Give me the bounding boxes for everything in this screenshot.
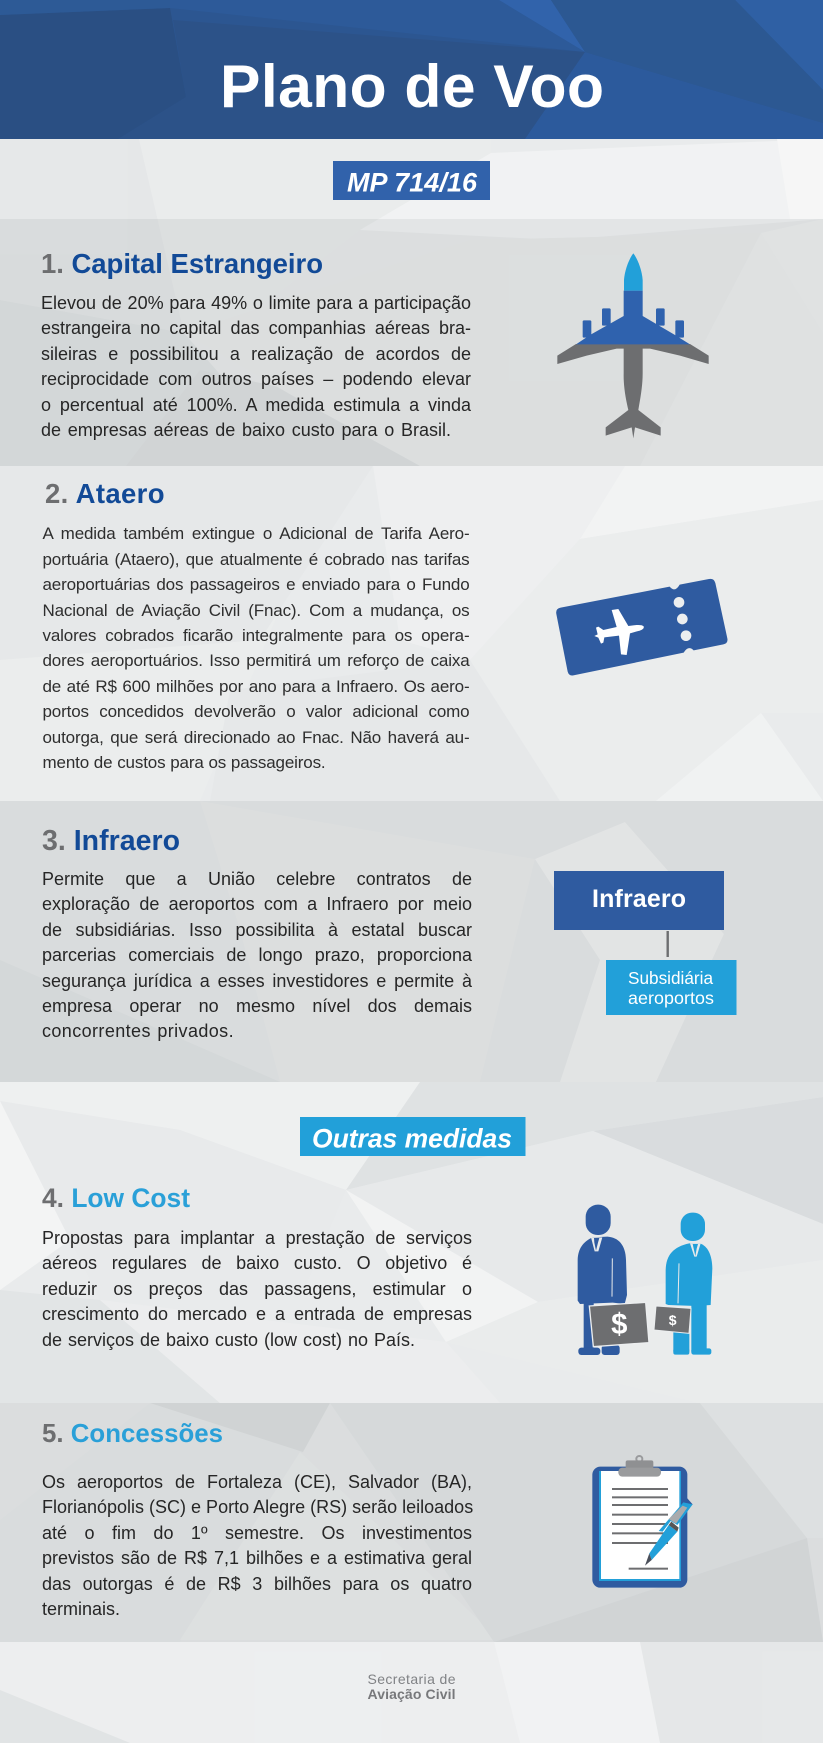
man left [578,1205,627,1355]
text block 5: das outorgas é de R$ 3 bilhões para os quatro [42,1574,472,1594]
text block 3: de subsidiárias. Isso possibilita à estatal buscar [42,920,472,940]
logo text: Secretaria de Aviação Civil [368,1671,456,1702]
box: subsidiary: aeroportos [628,988,714,1008]
heading 5: 5. Concessões [42,1420,223,1448]
icon: ticket [556,578,728,676]
heading 2: 2. Ataero [45,478,164,509]
briefcase small [654,1306,691,1333]
text block 2: mento de custos para os passageiros. [42,753,326,772]
text block 3 [42,869,472,1041]
text block 2: A medida também extingue o Adicional de Tarifa Aero- [42,524,470,543]
text block 3: segurança jurídica a esses investidores e permite à [42,971,472,991]
text block 3: exploração de aeroportos com a Infraero por meio [42,894,472,914]
text block 5: terminais. [42,1599,120,1619]
text block 4: de serviços de baixo custo (low cost) no País. [42,1330,415,1350]
panel: 4 Low Cost [42,1117,712,1355]
text block 1: de empresas aéreas de baixo custo para o Brasil. [41,420,451,440]
text block 2: portuária (Ataero), que atualmente é cobrado nas tarifas [42,550,470,569]
icon: businessmen with briefcases [578,1204,712,1355]
text block 4: reduzir os preços das passagens, estimular o [42,1279,472,1299]
text block 2: outorga, que será direcionado ao Fnac. Não haverá au- [42,728,470,747]
text block 1: Elevou de 20% para 49% o limite para a participação [41,293,471,313]
connector [666,931,669,957]
man right [666,1213,712,1355]
text block 3: empresa operar no mesmo nível dos demais [42,996,472,1016]
panel: 1 Capital Estrangeiro [0,219,823,466]
briefcase large: $ [611,1308,627,1341]
text block 1: estrangeira no capital das companhias aéreas bra- [41,318,471,338]
text block 5 [42,1472,473,1619]
text block 3: concorrentes privados. [42,1021,234,1041]
text block 2: de até R$ 600 milhões por ano para a Infraero. Os aero- [42,677,470,696]
text block 5: Os aeroportos de Fortaleza (CE), Salvador (BA), [42,1472,472,1492]
text block 1: sileiras e possibilitou a realização de acordos de [41,344,471,364]
text block 5: previstos são de R$ 7,1 bilhões e a estimativa geral [42,1548,472,1568]
text block 2: portos concedidos devolverão o valor adicional como [42,702,470,721]
badge: Outras medidas [300,1117,526,1156]
text block 2: dores aeroportuários. Isso permitirá um reforço de caixa [42,651,470,670]
briefcase small: $ [669,1312,677,1328]
text block 2: aeroportuárias dos passageiros e enviado para o Fundo [42,575,470,594]
panel: 5 Concessões [0,1403,823,1642]
panel: MP badge area [333,161,490,200]
header polygons [0,0,823,139]
text block 4 [42,1228,472,1350]
box: Infraero [554,871,724,930]
text block 3: Permite que a União celebre contratos de [42,869,472,889]
text block 4: crescimento do mercado e a entrada de empresas [42,1304,472,1324]
box: subsidiary [606,960,736,1015]
panel: 3 Infraero [0,801,823,1082]
heading 3: 3. Infraero [42,824,180,856]
logo text: Secretaria de Aviação Civil: Aviação Civil [368,1686,456,1702]
diagram: Infraero and subsidiary [554,871,736,1015]
icon: clipboard and pen [592,1455,693,1588]
text block 5: Florianópolis (SC) e Porto Alegre (RS) serão leiloados [42,1497,473,1517]
text block 2 [42,524,470,772]
heading 4: 4. Low Cost [42,1183,190,1213]
badge: MP 714/16 [333,161,490,200]
briefcase large [589,1302,649,1347]
box: Infraero: Infraero [592,885,686,913]
box: subsidiary: Subsidiária [628,968,713,988]
text block 1: reciprocidade com outros países – podendo elevar [41,369,471,389]
icon: airplane [557,253,709,438]
logo text: Secretaria de Aviação Civil: Secretaria de [368,1671,456,1687]
panel: header [0,0,823,139]
text block 4: aéreos regulares de baixo custo. O objetivo é [42,1253,472,1273]
badge: MP 714/16: MP 714/16 [347,168,478,198]
text block 2: Nacional de Aviação Civil (Fnac). Com a mudança, os [42,601,470,620]
text block 1 [41,293,471,440]
heading 1: 1. Capital Estrangeiro [41,248,323,279]
text block 4: Propostas para implantar a prestação de serviços [42,1228,472,1248]
text block 2: valores cobrados ficarão integralmente para os opera- [42,626,470,645]
title: Plano de Voo [220,52,604,120]
badge: Outras medidas: Outras medidas [312,1124,512,1154]
panel: 2 Ataero [42,478,728,772]
text block 3: parcerias comerciais de longo prazo, proporciona [42,945,472,965]
text block 1: o percentual até 100%. A medida estimula a vinda [41,395,471,415]
text block 5: até o fim do 1º semestre. Os investimentos [42,1523,472,1543]
panel: footer [368,1671,456,1702]
